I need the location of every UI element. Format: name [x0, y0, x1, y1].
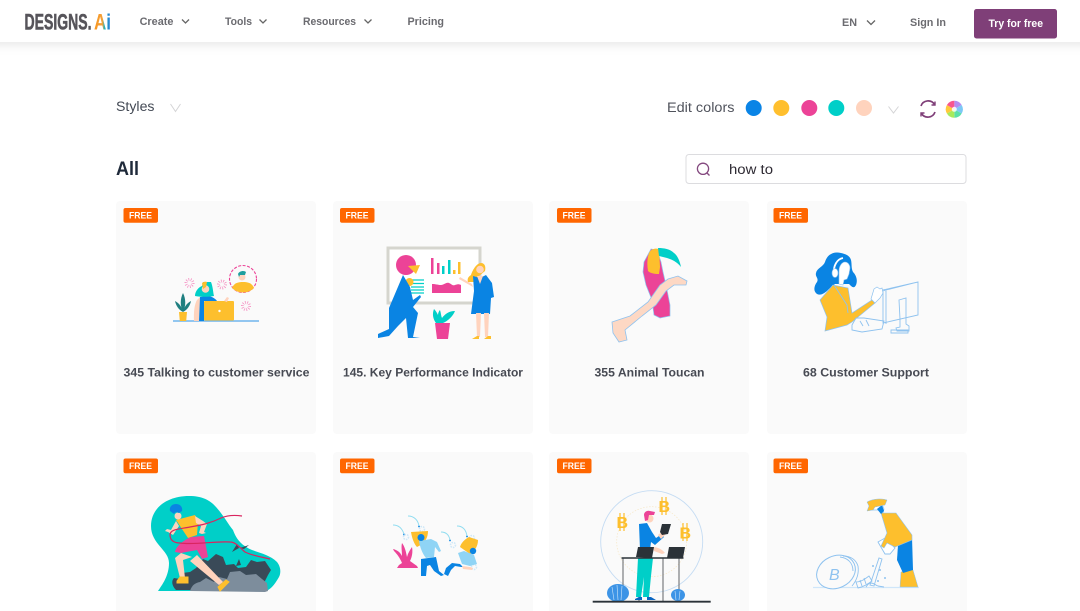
- free badge: [124, 208, 158, 223]
- free badge: FREE: [129, 461, 152, 471]
- styles dropdown: [116, 99, 180, 114]
- illustration: trader with bitcoins: B: [680, 526, 691, 542]
- illustration: people with shields: [393, 516, 478, 576]
- edit colors toolbar: Edit colors: [667, 100, 735, 115]
- free badge: FREE: [779, 461, 802, 471]
- card: bitcoin miner: [767, 452, 967, 611]
- icon: refresh: [921, 101, 935, 117]
- header bar: [0, 0, 1080, 42]
- try for free button: [974, 9, 1057, 38]
- illustration: runner: [151, 496, 280, 592]
- swatch: yellow: [773, 100, 789, 116]
- swatch: peach: [856, 100, 872, 116]
- card: 355 Animal Toucan: [549, 201, 749, 434]
- free badge: FREE: [562, 211, 586, 221]
- illustration: KPI board: [378, 248, 494, 339]
- language selector: EN: [842, 17, 857, 29]
- styles dropdown: Styles: [116, 99, 155, 114]
- illustration: trader with bitcoins: [593, 491, 711, 602]
- icon: search: [697, 163, 710, 176]
- swatch: pink: [801, 100, 817, 116]
- card: 68 Customer Support: [767, 201, 967, 434]
- illustration: trader with bitcoins: B: [658, 499, 670, 516]
- card: 145. Key Performance Indicator: [333, 201, 533, 434]
- nav: Tools: Tools: [225, 16, 252, 28]
- free badge: [557, 208, 592, 223]
- card title: 68 Customer Support: [803, 366, 929, 380]
- try for free button: Try for free: [988, 18, 1043, 30]
- free badge: FREE: [346, 211, 368, 221]
- icon: color wheel: [946, 101, 963, 118]
- card: 345 Talking to customer service: [116, 201, 316, 434]
- logo: DESIGNS.: [24, 10, 92, 34]
- search box: how to: [729, 162, 773, 177]
- card title: 355 Animal Toucan: [594, 366, 704, 380]
- illustration: miner: [811, 499, 919, 595]
- free badge: FREE: [129, 211, 152, 221]
- nav: Create: Create: [140, 16, 173, 28]
- free badge: FREE: [346, 461, 368, 471]
- free badge: [774, 458, 808, 473]
- free badge: [774, 208, 808, 223]
- logo: Ai: [94, 10, 111, 34]
- card title: 145. Key Performance Indicator: [343, 366, 523, 380]
- card title: 345 Talking to customer service: [124, 366, 310, 380]
- swatch: blue: [746, 100, 762, 116]
- card: runner crossing finish line: [116, 452, 316, 611]
- free badge: FREE: [562, 461, 586, 471]
- free badge: [124, 458, 158, 473]
- free badge: [340, 458, 374, 473]
- card: bitcoin trader: [549, 452, 749, 611]
- illustration: support agent: [814, 252, 918, 333]
- card: shield people: [333, 452, 533, 611]
- sign in: Sign In: [910, 17, 946, 29]
- free badge: [340, 208, 374, 223]
- heading: All: All: [116, 159, 139, 180]
- free badge: FREE: [779, 211, 802, 221]
- colors chevron: [888, 106, 898, 113]
- language selector: [842, 17, 875, 29]
- illustration: trader with bitcoins: B: [616, 515, 628, 532]
- nav: Resources: Resources: [303, 16, 356, 28]
- nav: Tools: [225, 16, 266, 28]
- illustration: toucan on arm: [612, 248, 687, 342]
- search box: [686, 154, 966, 184]
- nav: Create: [140, 16, 189, 28]
- free badge: [557, 458, 592, 473]
- illustration: miner: B: [829, 567, 840, 584]
- illustration: woman at laptop: [173, 266, 259, 321]
- swatch: teal: [828, 100, 844, 116]
- nav: Pricing: Pricing: [408, 16, 444, 28]
- edit colors toolbar: [667, 100, 963, 118]
